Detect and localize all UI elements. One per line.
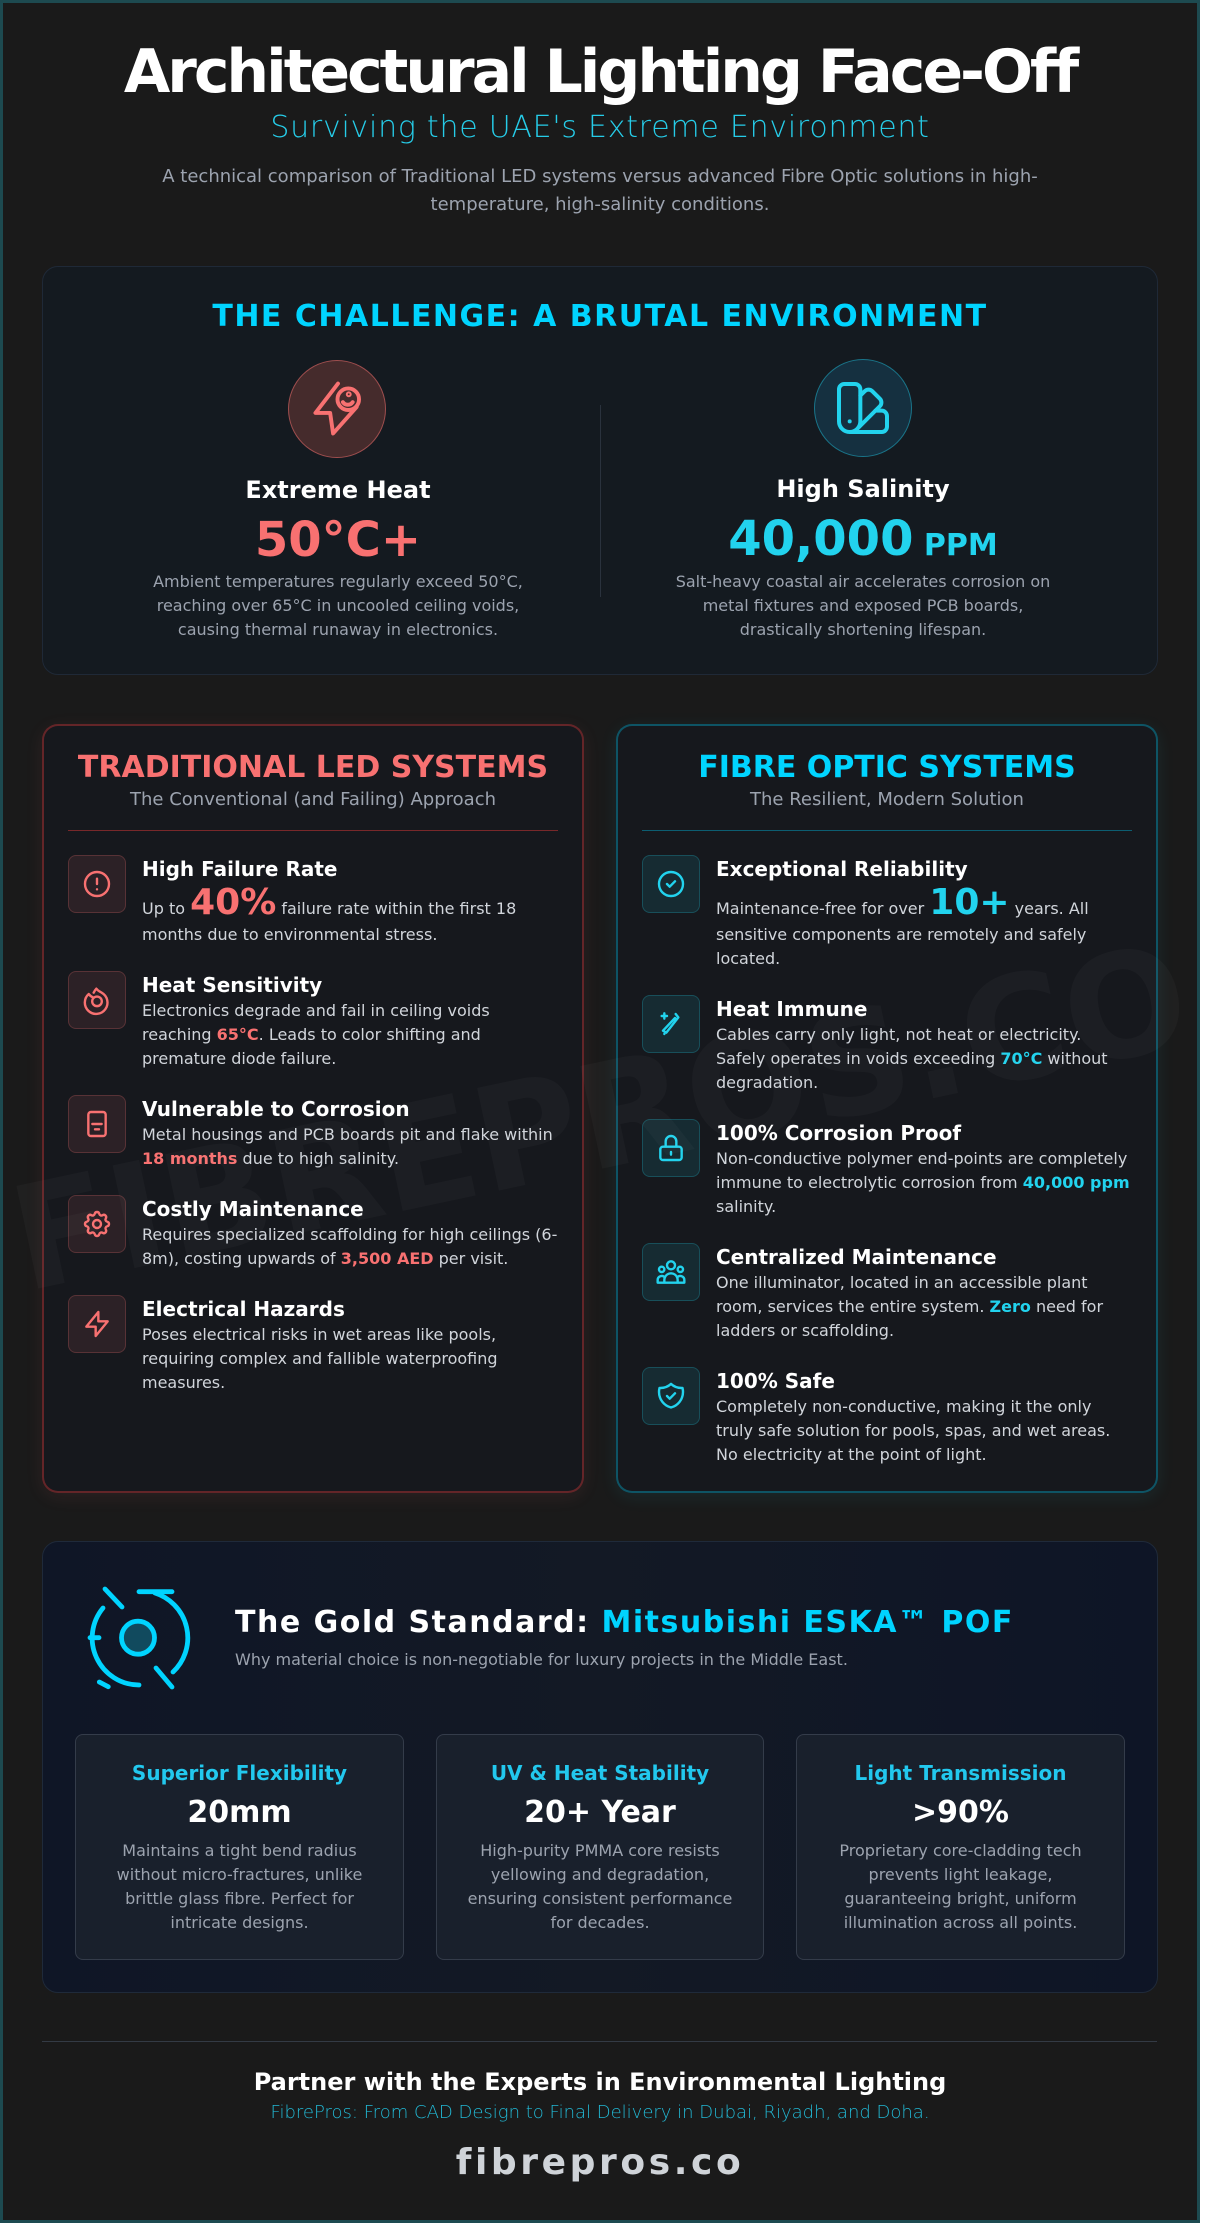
item: exceptional reliability (642, 855, 1089, 968)
card: light transmission: prevents light leakage, (869, 1865, 1052, 1884)
footer URL: fibrepros.co (456, 2142, 744, 2183)
item: costly maintenance (68, 1195, 557, 1268)
title: Architectural Lighting Face-Off (124, 37, 1076, 107)
stat: 40,000 PPM: 40,000 PPM (728, 511, 998, 567)
item: electrical hazards: measures. (142, 1373, 225, 1392)
item: heat sensitivity: premature diode failure. (142, 1049, 336, 1068)
item: electrical hazards: Poses electrical risks in wet areas like pools, (142, 1325, 496, 1344)
card: light transmission (796, 1734, 1125, 1960)
item: centralized maintenance: ladders or scaffolding. (716, 1321, 894, 1340)
footer rule (42, 2041, 1157, 2042)
item: corrosion proof (642, 1119, 1130, 1216)
item: heat sensitivity: Heat Sensitivity (142, 973, 322, 997)
icon: heat (288, 360, 386, 458)
item: costly maintenance: 8m), costing upwards of 3,500 AED per visit. (142, 1249, 508, 1268)
item: corrosion proof: immune to electrolytic corrosion from 40,000 ppm (716, 1173, 1130, 1192)
item: costly maintenance: Costly Maintenance (142, 1197, 364, 1221)
card: superior flexibility: without micro-fractures, unlike (117, 1865, 362, 1884)
item: corrosion proof: Non-conductive polymer end-points are completely (716, 1149, 1127, 1168)
high salinity text: metal fixtures and exposed PCB boards, (703, 596, 1023, 615)
card: superior flexibility (75, 1734, 404, 1960)
item: heat immune: Safely operates in voids exceeding 70°C without (716, 1049, 1108, 1068)
stat: 50°C+: 50°C+ (255, 512, 421, 568)
card: light transmission: guaranteeing bright, uniform (844, 1889, 1077, 1908)
extreme heat heading: Extreme Heat (245, 476, 431, 504)
LED panel heading: TRADITIONAL LED SYSTEMS (78, 750, 548, 785)
item: heat sensitivity: Electronics degrade and fail in ceiling voids (142, 1001, 490, 1020)
item: high failure rate: Up to 40% failure rate within the first 18 (142, 882, 516, 923)
item: 100% safe: Completely non-conductive, making it the only (716, 1397, 1091, 1416)
panel: the challenge (42, 266, 1158, 675)
item: exceptional reliability: Exceptional Reliability (716, 857, 968, 881)
card: superior flexibility: 20mm (187, 1795, 292, 1830)
intro text: temperature, high-salinity conditions. (431, 194, 769, 215)
intro text: A technical comparison of Traditional LED systems versus advanced Fibre Optic solutions in high- (162, 166, 1038, 187)
item: high failure rate (68, 855, 516, 944)
item: corrosion proof: 100% Corrosion Proof (716, 1121, 961, 1145)
item: heat sensitivity (68, 971, 490, 1068)
extreme heat text (153, 572, 523, 639)
item: centralized maintenance: Centralized Maintenance (716, 1245, 997, 1269)
panel: fibre optic systems (616, 724, 1158, 1493)
item: electrical hazards: requiring complex and fallible waterproofing (142, 1349, 498, 1368)
intro text (162, 166, 1038, 215)
item: exceptional reliability: located. (716, 949, 780, 968)
item: heat immune (642, 995, 1108, 1092)
item: vulnerable to corrosion: Vulnerable to Corrosion (142, 1097, 410, 1121)
gold standard heading: The Gold Standard: Mitsubishi ESKA™ POF (235, 1605, 1014, 1640)
extreme heat text: causing thermal runaway in electronics. (178, 620, 498, 639)
subtitle: Surviving the UAE's Extreme Environment (270, 110, 930, 145)
high salinity text: Salt-heavy coastal air accelerates corrosion on (676, 572, 1050, 591)
item: exceptional reliability: Maintenance-free for over 10+ years. All (716, 882, 1089, 923)
item: high failure rate: months due to environmental stress. (142, 925, 437, 944)
item: centralized maintenance: room, services the entire system. Zero need for (716, 1297, 1103, 1316)
panel: traditional LED systems (42, 724, 584, 1493)
divider line (600, 405, 601, 597)
LED panel heading: The Conventional (and Failing) Approach (130, 789, 496, 810)
item: electrical hazards (68, 1295, 498, 1392)
item: 100% safe: truly safe solution for pools, spas, and wet areas. (716, 1421, 1110, 1440)
panel: gold standard (42, 1541, 1158, 1993)
item: centralized maintenance: One illuminator, located in an accessible plant (716, 1273, 1088, 1292)
challenge heading: THE CHALLENGE: A BRUTAL ENVIRONMENT (212, 299, 988, 334)
high salinity text (676, 572, 1050, 639)
card: light transmission: illumination across all points. (844, 1913, 1077, 1932)
high salinity heading: High Salinity (776, 475, 950, 503)
item: 100% safe (642, 1367, 1110, 1464)
LED panel heading (68, 750, 558, 831)
item: high failure rate: High Failure Rate (142, 857, 337, 881)
card: light transmission: Proprietary core-cladding tech (839, 1841, 1082, 1860)
card: superior flexibility: brittle glass fibre. Perfect for (125, 1889, 354, 1908)
fibre panel heading: FIBRE OPTIC SYSTEMS (698, 750, 1076, 785)
footer heading: Partner with the Experts in Environmental Lighting (254, 2068, 946, 2096)
item: centralized maintenance (642, 1243, 1104, 1340)
card: UV and heat stability: ensuring consistent performance (468, 1889, 732, 1908)
icon: fibre cross-section (88, 1586, 190, 1690)
item: heat immune: Heat Immune (716, 997, 867, 1021)
item: heat immune: Cables carry only light, not heat or electricity. (716, 1025, 1081, 1044)
card: UV and heat stability: for decades. (550, 1913, 650, 1932)
card: light transmission: Light Transmission (855, 1761, 1066, 1785)
extreme heat text: reaching over 65°C in uncooled ceiling voids, (157, 596, 519, 615)
card: UV and heat stability (436, 1734, 764, 1960)
item: exceptional reliability: sensitive components are remotely and safely (716, 925, 1086, 944)
item: corrosion proof: salinity. (716, 1197, 776, 1216)
item: heat immune: degradation. (716, 1073, 818, 1092)
card: superior flexibility: intricate designs. (170, 1913, 309, 1932)
extreme heat text: Ambient temperatures regularly exceed 50°C, (153, 572, 523, 591)
item: vulnerable to corrosion: Metal housings and PCB boards pit and flake within (142, 1125, 553, 1144)
item: costly maintenance: Requires specialized scaffolding for high ceilings (6- (142, 1225, 557, 1244)
card: UV and heat stability: High-purity PMMA core resists (480, 1841, 720, 1860)
card: UV and heat stability: yellowing and degradation, (491, 1865, 709, 1884)
card: UV and heat stability: UV & Heat Stability (491, 1761, 709, 1785)
item: heat sensitivity: reaching 65°C. Leads to color shifting and (142, 1025, 481, 1044)
item: 100% safe: No electricity at the point of light. (716, 1445, 987, 1464)
card: light transmission: >90% (912, 1795, 1009, 1830)
card: UV and heat stability: 20+ Year (524, 1795, 676, 1830)
item: vulnerable to corrosion: 18 months due to high salinity. (142, 1149, 399, 1168)
icon: salinity swatch (814, 359, 912, 457)
high salinity text: drastically shortening lifespan. (740, 620, 986, 639)
gold standard subheading: Why material choice is non-negotiable for luxury projects in the Middle East. (235, 1650, 848, 1669)
item: 100% safe: 100% Safe (716, 1369, 835, 1393)
item: electrical hazards: Electrical Hazards (142, 1297, 345, 1321)
card: superior flexibility: Superior Flexibility (132, 1761, 347, 1785)
item: vulnerable to corrosion (68, 1095, 553, 1168)
footer subheading: FibrePros: From CAD Design to Final Delivery in Dubai, Riyadh, and Doha. (270, 2102, 930, 2123)
fibre panel heading: The Resilient, Modern Solution (750, 789, 1024, 810)
fibre panel heading (642, 750, 1132, 831)
watermark: FIBREPROS.CO (0, 911, 1200, 1325)
card: superior flexibility: Maintains a tight bend radius (122, 1841, 357, 1860)
